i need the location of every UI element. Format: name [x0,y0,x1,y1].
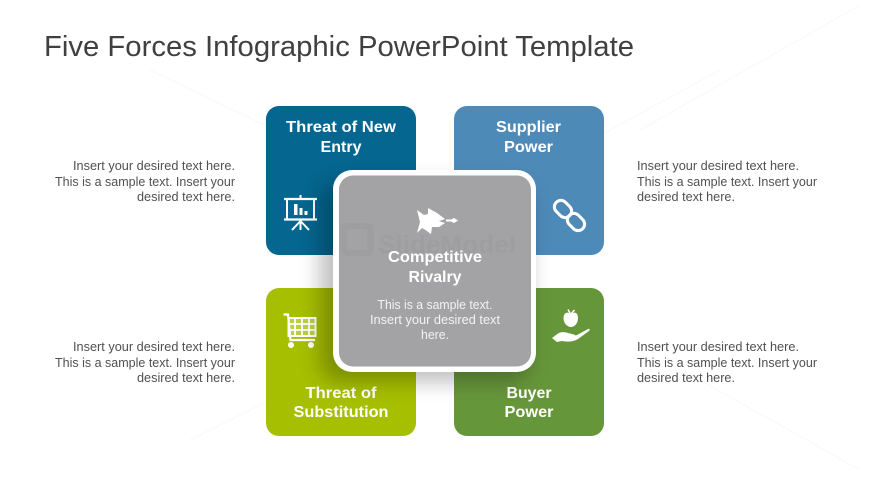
title: Five Forces Infographic PowerPoint Template [44,31,634,63]
heading: buyer power [504,385,554,421]
heading: threat of substitution: Threat of [306,385,377,402]
text block: top left [55,158,236,204]
icon: hand holding apple [552,310,590,342]
heading: threat of new entry [286,119,397,156]
panel: supplier power [454,106,604,255]
text block: center description: here. [421,327,449,342]
panel: competitive rivalry [320,170,536,382]
text block: bottom right: This is a sample text. Insert your [637,355,818,370]
text block: bottom left [55,339,236,385]
panel: threat of new entry [266,106,416,255]
icon: chain link [552,198,587,233]
text block: bottom left: This is a sample text. Insert your [55,355,236,370]
text block: center description: Insert your desired text [370,312,500,327]
icon: presentation board [284,195,317,230]
heading: threat of new entry: Entry [320,139,362,156]
heading: competitive rivalry: Competitive [388,249,482,266]
text block: bottom left: desired text here. [137,370,235,385]
icon: big fish chasing small fish [417,208,458,234]
text block: top right: Insert your desired text here. [637,158,799,173]
heading: competitive rivalry [388,249,482,286]
text block: center description [370,297,500,342]
panel: buyer power [454,288,604,436]
heading: competitive rivalry: Rivalry [408,269,462,286]
heading: supplier power: Power [504,139,553,156]
heading: threat of new entry: Threat of New [286,119,397,136]
heading: supplier power [496,119,561,156]
heading: buyer power: Buyer [506,385,552,402]
icon: shopping cart [284,314,316,348]
text block: top left: desired text here. [137,189,235,204]
heading: buyer power: Power [504,404,554,421]
text block: top right: This is a sample text. Insert your [637,174,818,189]
text block: top right [637,158,818,204]
panel: threat of substitution [266,288,416,436]
text block: bottom left: Insert your desired text here. [73,339,235,354]
watermark: SlideModel [378,231,516,259]
text block: bottom right: desired text here. [637,370,735,385]
text block: top left: This is a sample text. Insert your [55,174,236,189]
text block: center description: This is a sample text. [378,297,492,312]
watermark [341,223,516,259]
heading: threat of substitution [294,385,388,421]
text block: bottom right [637,339,818,385]
text block: top left: Insert your desired text here. [73,158,235,173]
heading: supplier power: Supplier [496,119,561,136]
heading: threat of substitution: Substitution [294,404,388,421]
text block: bottom right: Insert your desired text here. [637,339,799,354]
text block: top right: desired text here. [637,189,735,204]
